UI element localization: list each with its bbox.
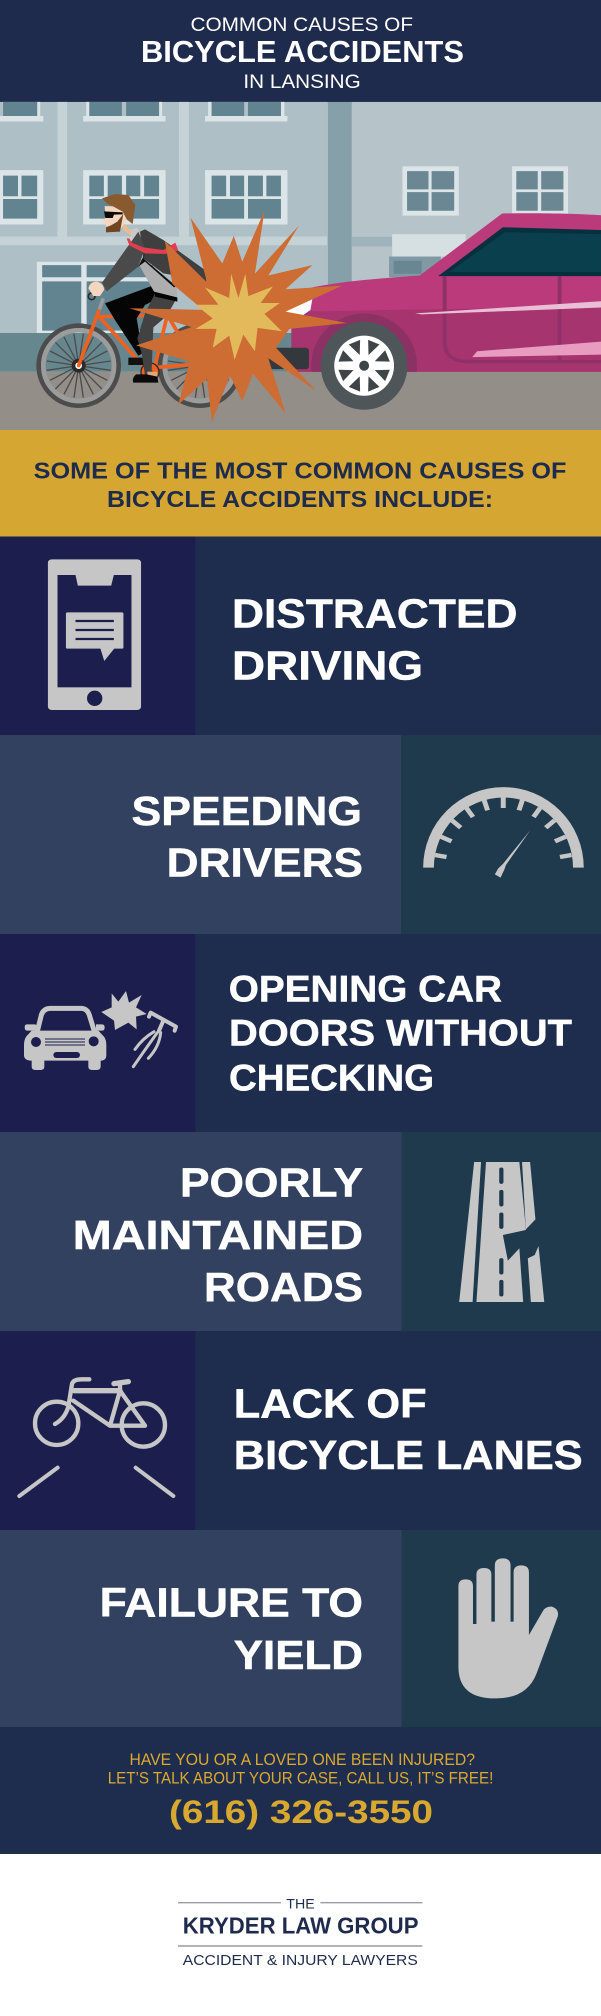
- label: MAINTAINED: [73, 1212, 363, 1258]
- label: ROADS: [204, 1264, 363, 1310]
- banner line 2: BICYCLE ACCIDENTS INCLUDE:: [107, 486, 493, 512]
- label: DISTRACTED: [232, 591, 518, 637]
- label: OPENING CAR: [229, 969, 502, 1010]
- label: POORLY: [180, 1160, 363, 1206]
- panel: poorly maintained roads: [0, 1132, 601, 1331]
- panel: opening car doors: [0, 934, 601, 1132]
- label: DRIVING: [232, 642, 423, 688]
- banner line 1: SOME OF THE MOST COMMON CAUSES OF: [34, 458, 566, 484]
- panel: call to action: [0, 1727, 601, 1854]
- label: LACK OF: [234, 1380, 427, 1426]
- label: BICYCLE LANES: [234, 1432, 583, 1478]
- label: [232, 591, 518, 688]
- icon: raised hand: [458, 1558, 558, 1698]
- label: DRIVERS: [167, 840, 363, 886]
- icon: speedometer: [423, 787, 584, 878]
- icon: bicycle with lane lines: [19, 1379, 173, 1496]
- label: [132, 788, 363, 886]
- panel: subheading banner: [0, 430, 601, 537]
- label: [229, 969, 573, 1099]
- label: CHECKING: [229, 1058, 434, 1099]
- icon: damaged road: [459, 1162, 544, 1302]
- title main: BICYCLE ACCIDENTS: [141, 35, 464, 69]
- title line 3: IN LANSING: [243, 71, 361, 93]
- panel: header: [0, 0, 601, 102]
- icon: car and bicycle collision: [24, 991, 176, 1070]
- logo: The Kryder Law Group: THE: [286, 1896, 315, 1912]
- panel: failure to yield: [0, 1530, 601, 1727]
- logo: The Kryder Law Group: KRYDER LAW GROUP: [183, 1912, 418, 1938]
- label: FAILURE TO: [100, 1580, 363, 1626]
- label: [234, 1380, 583, 1478]
- label: SPEEDING: [132, 788, 362, 834]
- logo: The Kryder Law Group: [178, 1896, 422, 1969]
- label: [100, 1580, 363, 1678]
- car: [0, 213, 601, 430]
- panel: speeding drivers: [0, 735, 601, 934]
- collision burst: [130, 211, 347, 422]
- label: [73, 1160, 363, 1310]
- cta line 1: HAVE YOU OR A LOVED ONE BEEN INJURED?: [130, 1750, 475, 1769]
- label: YIELD: [234, 1632, 363, 1678]
- cta line 2: LET’S TALK ABOUT YOUR CASE, CALL US, IT’S FREE!: [108, 1769, 493, 1788]
- panel: lack of bicycle lanes: [0, 1331, 601, 1530]
- cyclist: [88, 194, 207, 383]
- logo: The Kryder Law Group: ACCIDENT & INJURY LAWYERS: [183, 1953, 418, 1969]
- icon: phone with message: [48, 559, 141, 710]
- illustration: cyclist hit by car: [0, 102, 601, 430]
- label: DOORS WITHOUT: [229, 1013, 573, 1054]
- phone number: (616) 326-3550: [169, 1794, 433, 1830]
- title line 1: COMMON CAUSES OF: [190, 14, 413, 36]
- panel: distracted driving: [0, 536, 601, 735]
- bicycle: [39, 293, 240, 406]
